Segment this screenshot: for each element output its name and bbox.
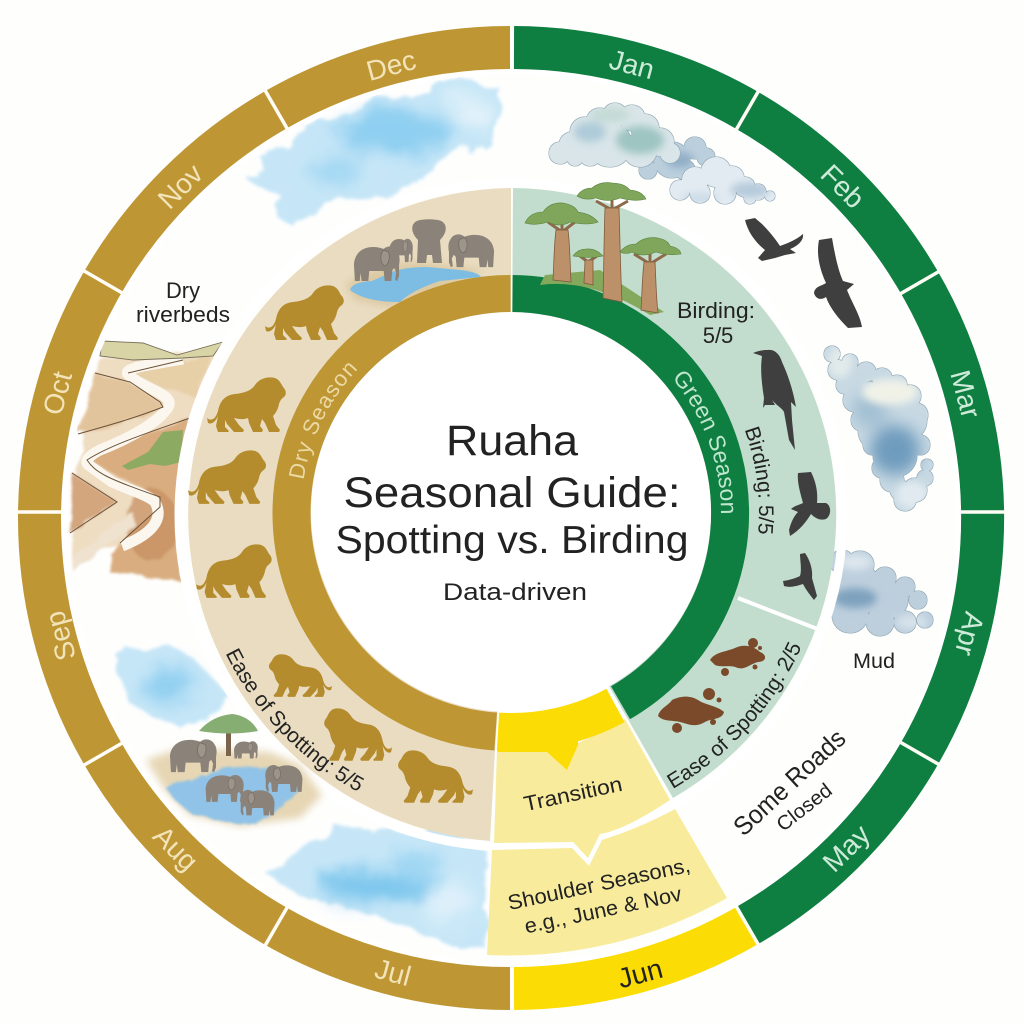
white halo cutting illustrations at ring edges [179, 183, 843, 847]
rating: birding straight [677, 298, 755, 348]
cloud: small right [670, 156, 776, 204]
illustration: waterhole with elephants, August [146, 714, 322, 826]
acacia tree [199, 714, 258, 756]
illustration: waterhole with elephants, dry season [350, 219, 494, 302]
elephant facing viewer [412, 219, 446, 263]
month labels: Oct [37, 368, 78, 418]
bird: perched long tail [753, 350, 796, 450]
month labels: Jun [614, 953, 666, 994]
illustration: dry riverbed [70, 341, 223, 582]
season label: dry season: Dry Season [288, 363, 358, 478]
cloud: far centre [638, 136, 716, 180]
panel: green season band [511, 188, 836, 798]
illustration: baobab trees [525, 183, 681, 315]
illustration: clouds, January [548, 102, 776, 204]
icons: birds [745, 218, 862, 600]
month labels: Aug [147, 820, 204, 877]
bird: gliding [745, 218, 803, 261]
illustration: blue sky wash, August [116, 646, 232, 726]
month labels: Jul [372, 953, 414, 992]
yellow tab pointer [498, 738, 578, 770]
label: mud: Mud [853, 650, 895, 673]
inner season ring [291, 294, 730, 732]
cloud: large green-grey [548, 102, 680, 168]
subtitle: Data-driven [443, 579, 587, 606]
illustration: cloud, March [824, 346, 934, 512]
month labels: Mar [944, 367, 987, 421]
rating: birding curved: Birding: 5/5 [745, 426, 774, 534]
label: shoulder seasons: Shoulder Seasons, [506, 854, 692, 915]
panel: dry season band [188, 188, 511, 841]
illustration: cloud, April [832, 550, 934, 636]
month labels: May [817, 819, 876, 878]
label: dry riverbeds: riverbeds [136, 302, 230, 327]
label: dry riverbeds [136, 278, 230, 327]
elephants [170, 739, 302, 815]
title: Ruaha [446, 417, 578, 465]
label: shoulder seasons: e.g., June & Nov [522, 883, 684, 938]
icons: mud splats [658, 638, 765, 733]
illustration: blue sky wash, December [245, 82, 500, 226]
panel: shoulder seasons segment [487, 809, 727, 956]
title: Spotting vs. Birding [336, 519, 688, 562]
label: dry riverbeds: Dry [166, 278, 200, 303]
waterhole shore, dry season [345, 262, 484, 308]
month labels: Jan [606, 44, 658, 85]
month labels: Apr [949, 609, 990, 659]
icons: lions, ease of spotting [188, 285, 473, 803]
title: Seasonal Guide: [344, 469, 680, 517]
bird: eagle [814, 238, 862, 328]
label: some roads closed: Some Roads [727, 723, 851, 842]
month labels: Feb [815, 158, 871, 214]
panel: transition segment [494, 719, 670, 858]
title [336, 417, 688, 562]
label: transition: Transition [522, 773, 624, 816]
rating: ease of spotting dry season: Ease of Spotting: 5/5 [226, 648, 364, 790]
month labels: Nov [152, 158, 209, 215]
bird: raptor [789, 472, 830, 536]
rating: birding straight: 5/5 [703, 323, 733, 348]
month labels: Dec [363, 44, 419, 87]
illustration: blue sky wash, July [268, 826, 488, 948]
season label: green season: Green Season [675, 372, 734, 513]
rating: ease of spotting green season: Ease of Spotting: 2/5 [666, 642, 800, 788]
white centre disc [311, 312, 711, 712]
month labels: Sep [39, 608, 82, 664]
label: shoulder seasons [506, 854, 692, 938]
rating: birding straight: Birding: [677, 298, 755, 323]
label: some roads closed: Closed [773, 779, 837, 836]
bird: small [783, 553, 817, 600]
